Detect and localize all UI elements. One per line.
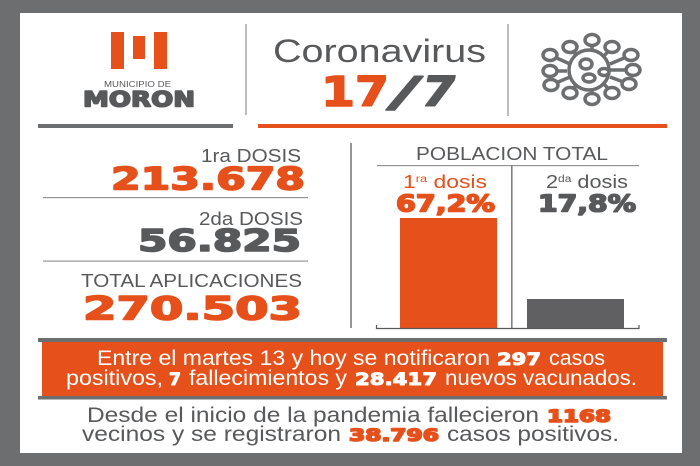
text block: pandemic totals: vecinos y se registraron	[82, 422, 341, 446]
date: 17	[321, 68, 389, 116]
bar: second dose	[527, 299, 624, 328]
label: first dose: 1	[403, 172, 413, 192]
bar: first dose	[400, 218, 497, 328]
label: first dose: ra	[416, 174, 428, 185]
label: second dose: da	[558, 174, 572, 185]
label: second dose: dosis	[571, 172, 628, 192]
date	[321, 68, 456, 116]
logo: Municipio de Moron	[83, 32, 195, 112]
stat: second dose: 2da DOSIS	[199, 209, 303, 229]
callout: recent figures: nuevos vacunados.	[445, 367, 637, 390]
chart: poblacion total	[376, 144, 639, 329]
text block: pandemic totals: 38.796	[349, 426, 439, 446]
stat: first dose	[111, 146, 305, 198]
logo: Municipio de Moron: MUNICIPIO DE	[104, 79, 171, 89]
label: second dose: 2	[546, 172, 556, 192]
callout: recent figures	[38, 338, 667, 400]
stat: second dose: 56.825	[138, 224, 301, 259]
stat: total applications: 270.503	[83, 290, 302, 328]
stat: first dose: 213.678	[111, 162, 305, 198]
callout: recent figures: Entre el martes 13 y hoy se notificaron	[97, 347, 490, 370]
callout: recent figures: fallecimientos y	[189, 367, 348, 390]
label: first dose: dosis	[427, 172, 487, 192]
value: second dose: 17,8%	[538, 192, 636, 218]
callout: recent figures: 28.417	[355, 370, 437, 390]
text block: pandemic totals: casos positivos.	[447, 422, 619, 446]
stat: first dose: 1ra DOSIS	[201, 146, 301, 166]
date: /	[386, 68, 423, 116]
callout: recent figures: 297	[497, 350, 541, 370]
icon: virus	[543, 34, 640, 104]
stat: second dose	[138, 209, 303, 259]
logo: Municipio de Moron: MORON	[83, 88, 195, 112]
callout: recent figures: 7	[169, 370, 181, 390]
stat: total applications: TOTAL APLICACIONES	[81, 271, 302, 291]
text block: pandemic totals: 1168	[547, 407, 611, 427]
callout: recent figures: positivos,	[66, 367, 163, 390]
date: 7	[422, 68, 456, 116]
stat: total applications	[81, 271, 302, 328]
chart: poblacion total: POBLACION TOTAL	[416, 144, 608, 164]
callout: recent figures: casos	[549, 347, 605, 370]
title: Coronavirus	[273, 33, 486, 69]
text block: pandemic totals: Desde el inicio de la pandemia fallecieron	[87, 403, 539, 427]
text block: pandemic totals	[82, 403, 619, 446]
value: first dose: 67,2%	[396, 192, 495, 218]
